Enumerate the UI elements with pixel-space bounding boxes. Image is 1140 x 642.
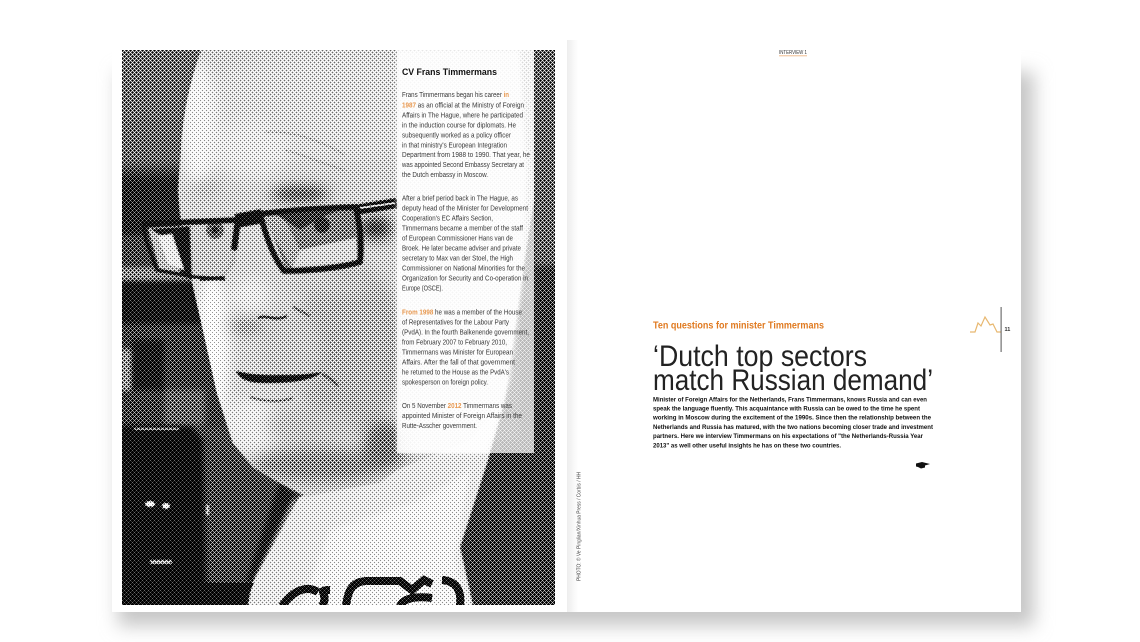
CV text block: the Dutch embassy in Moscow. [402,172,488,179]
page shadow [118,72,1034,626]
CV text block: of Representatives for the Labour Party [402,320,509,327]
CV text block: Organization for Security and Co-operation in [402,276,528,283]
title [653,340,933,397]
intro text: Minister of Foreign Affairs for the Netherlands, Frans Timmermans, knows Russia and can even [653,396,927,403]
CV text block: Broek. He later became adviser and private [402,246,521,253]
icon: pointing hand [916,462,930,468]
portrait photo [115,40,565,620]
CV text block: secretary to Max van der Stoel, the High [402,256,513,263]
icon: skyline [970,317,1001,332]
intro text: Netherlands and Russia has matured, with the two nations becoming closer trade and investment [653,424,934,431]
CV text block: Cooperation's EC Affairs Section, [402,216,493,223]
kicker: Ten questions for minister Timmermans [653,320,824,332]
CV text block: Department from 1988 to 1990. That year, he [402,152,530,159]
CV text block: in the induction course for diplomats. He [402,122,516,129]
CV text block: On 5 November 2012 Timmermans was [402,403,512,410]
page number rule [1001,307,1002,352]
CV text block: Frans Timmermans began his career in [402,92,509,99]
intro text: working in Moscow during the excitement of the 1990s. Since then the relationship between the [652,415,931,422]
intro text: speak the language fluently. This acquaintance with Russia can be owed to the time he spent [653,406,921,413]
CV text block: was appointed Second Embassy Secretary at [401,162,524,169]
title: match Russian demand’ [653,364,933,397]
intro text: 2013" as well other useful insights he has on these two countries. [653,442,841,449]
CV text block: from February 2007 to February 2010, [402,340,507,347]
CV text block: in that ministry's European Integration [402,142,507,149]
CV text block: Rutte-Asscher government. [402,423,477,430]
intro text: partners. Here we interview Timmermans on his expectations of "the Netherlands-Russia Year [653,433,923,440]
CV text block: Timmermans was Minister for European [402,350,513,357]
left page [112,40,567,620]
CV text block: After a brief period back in The Hague, as [402,196,518,203]
translucent CV panel [397,50,534,453]
CV text block: Affairs. After the fall of that government [402,360,515,367]
CV text block: (PvdA). In the fourth Balkenende government, [402,330,529,337]
CV text block: deputy head of the Minister for Development [402,206,528,213]
CV text block: of European Commissioner Hans van de [402,236,513,243]
CV text block: Commissioner on National Minorities for the [402,266,525,273]
CV text block: From 1998 he was a member of the House [402,310,522,317]
right page [567,40,1021,612]
microphone highlights [134,428,209,564]
intro text [652,396,934,449]
CV text block: spokesperson on foreign policy. [402,380,488,387]
CV text block: Affairs in The Hague, where he participated [402,112,523,119]
CV text block: appointed Minister of Foreign Affairs in the [402,413,522,420]
CV text block: 1987 as an official at the Ministry of Foreign [402,102,524,109]
photo credit: PHOTO: © Ve Pinglian/Xinhua Press / Corbis / HH [576,472,582,581]
CV text block [401,92,530,430]
CV text block: Timmermans became a member of the staff [402,226,523,233]
CV text block: subsequently worked as a policy officer [402,132,512,139]
mouth [236,371,322,383]
glasses [142,203,397,279]
running head: INTERVIEW 1 [779,50,807,56]
page number: 11 [1004,327,1010,333]
CV text block: Europe (OSCE). [402,286,443,293]
CV heading: CV Frans Timmermans [402,67,497,77]
title: ‘Dutch top sectors [653,340,867,373]
CV text block: he returned to the House as the PvdA's [402,370,509,377]
